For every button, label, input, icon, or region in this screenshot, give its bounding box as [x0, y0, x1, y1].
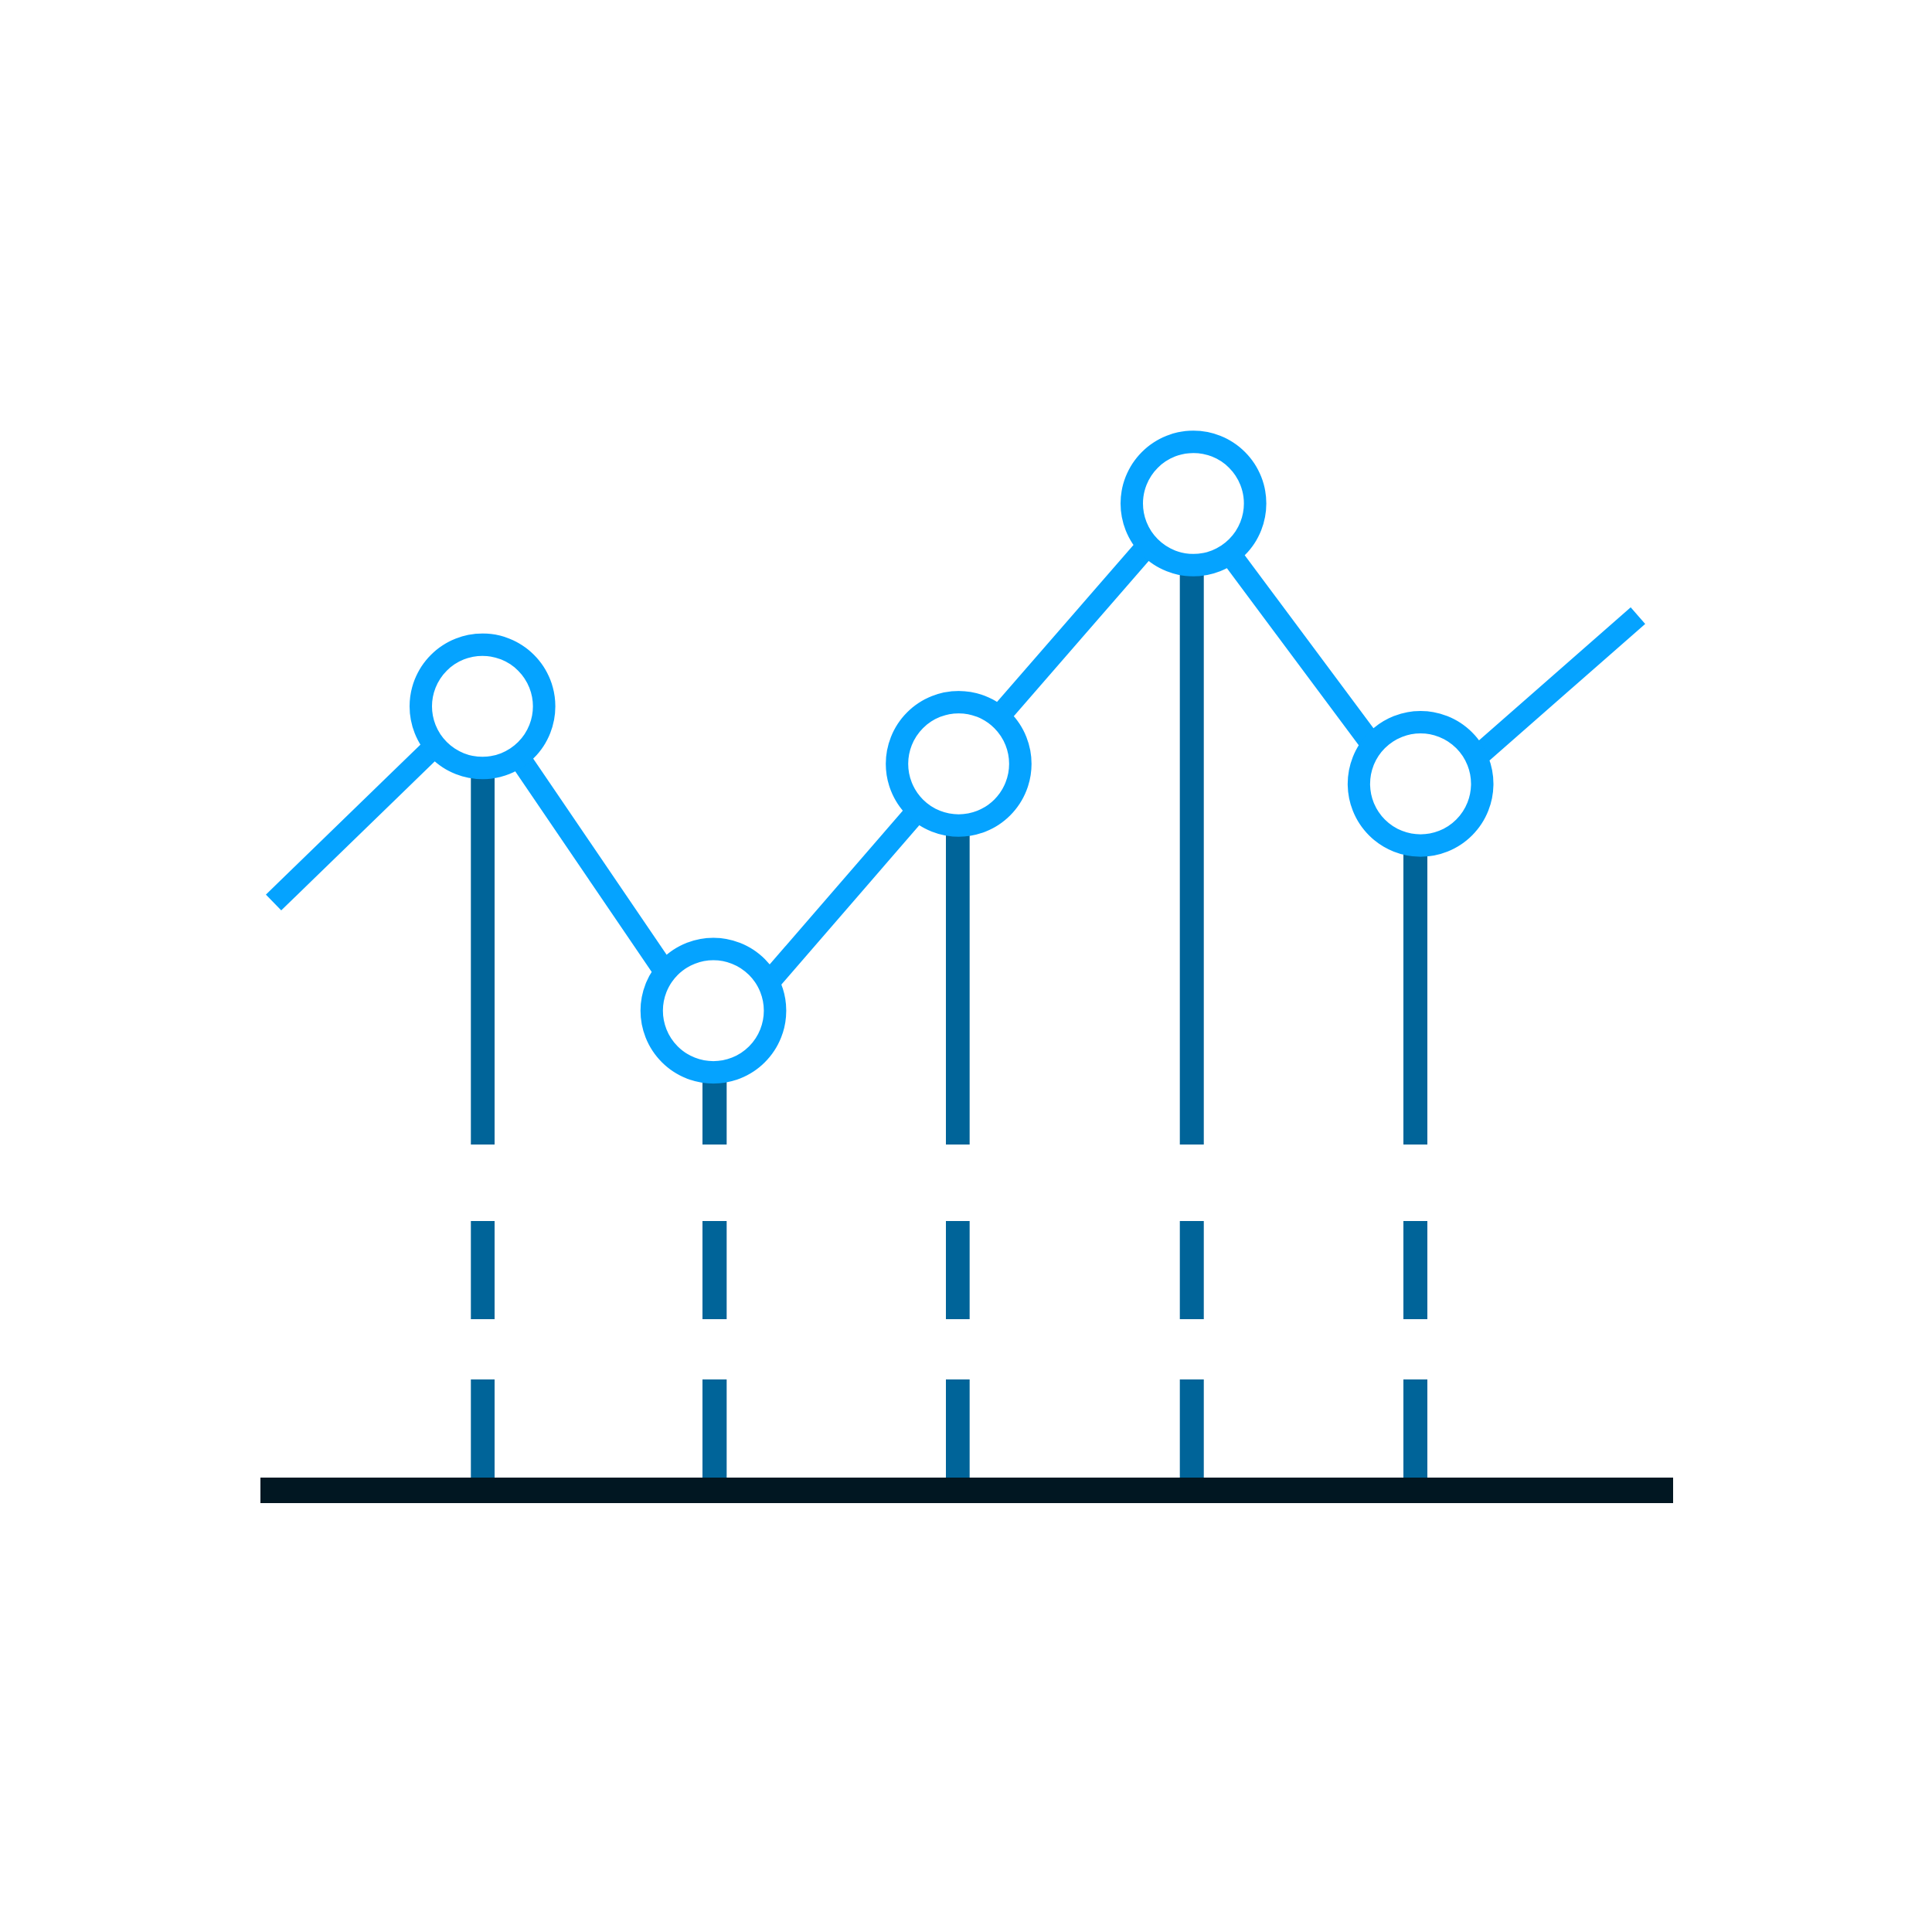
drop line 2 — [702, 1011, 726, 1478]
marker 5 — [1359, 722, 1482, 845]
data point markers — [420, 442, 1482, 1073]
marker 3 — [897, 702, 1020, 825]
marker 4 — [1131, 442, 1255, 565]
trend line segments — [274, 545, 1638, 983]
marker 1 — [420, 645, 544, 768]
marker 2 — [651, 949, 775, 1073]
drop line 3 — [946, 764, 970, 1478]
drop line 4 — [1180, 504, 1204, 1478]
baseline axis — [260, 1478, 1673, 1503]
dashed drop lines — [471, 504, 1427, 1478]
drop line 5 — [1403, 784, 1427, 1478]
drop line 1 — [471, 706, 495, 1478]
